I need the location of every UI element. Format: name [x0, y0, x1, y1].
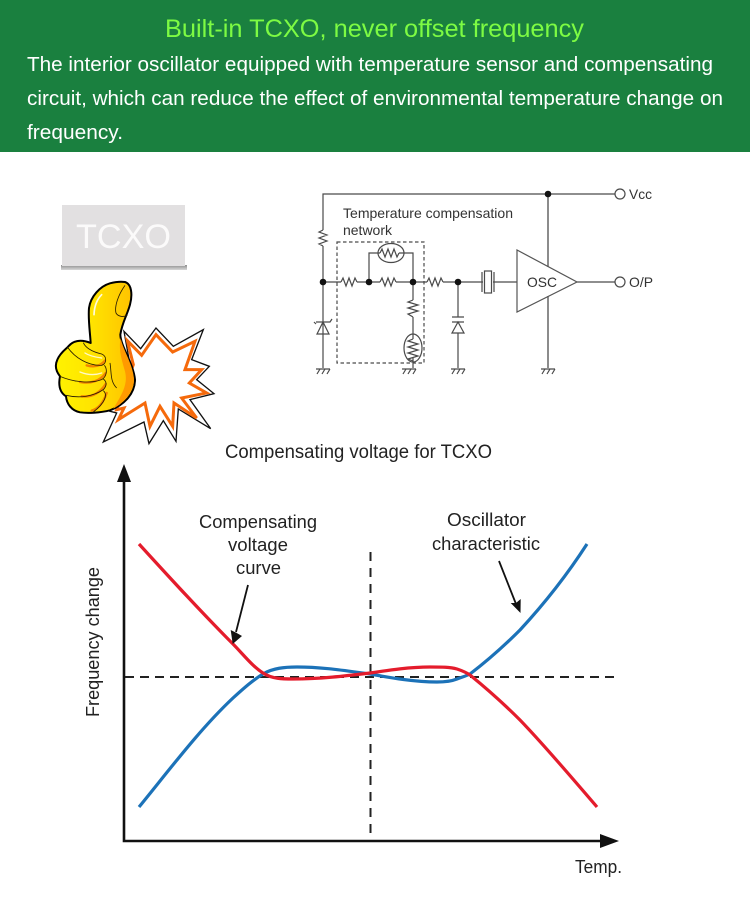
circuit labels	[343, 186, 653, 290]
axis and curve labels: Temp.	[575, 857, 622, 877]
nodes	[320, 191, 551, 285]
terminals	[615, 189, 625, 199]
description text: circuit, which can reduce the effect of environmental temperature change on	[27, 88, 723, 110]
line chart	[83, 464, 622, 877]
amplifier	[517, 250, 577, 312]
ground symbols	[316, 369, 555, 374]
finger and nail lines	[60, 285, 127, 412]
description text: The interior oscillator equipped with temperature sensor and compensating	[27, 54, 713, 76]
hand shading	[113, 338, 134, 409]
oscillator characteristic curve	[139, 544, 587, 807]
thermistors	[378, 244, 404, 262]
TCXO badge	[61, 205, 187, 270]
axis and curve labels: Oscillator	[447, 510, 526, 530]
TCXO badge: TCXO	[76, 218, 171, 256]
circuit labels: Vcc	[629, 186, 652, 202]
burst	[103, 328, 214, 444]
axis and curve labels	[83, 510, 622, 877]
axis and curve labels: characteristic	[432, 534, 540, 554]
crystal	[482, 272, 494, 292]
heading: Built-in TCXO, never offset frequency	[165, 15, 584, 43]
wires	[323, 194, 615, 368]
network box	[337, 242, 424, 363]
diodes	[314, 317, 464, 334]
circuit labels: OSC	[527, 274, 557, 290]
circuit diagram	[314, 186, 653, 374]
axis and curve labels: curve	[236, 558, 281, 578]
arrow: to compensating curve	[231, 585, 248, 644]
chart title: Compensating voltage for TCXO	[225, 442, 492, 463]
axis and curve labels: voltage	[228, 535, 288, 555]
description text: frequency.	[27, 122, 123, 144]
axis and curve labels: Frequency change	[83, 567, 103, 717]
axis and curve labels: Compensating	[199, 512, 317, 532]
axes	[124, 478, 606, 841]
arrow: to oscillator curve	[499, 561, 521, 613]
resistors	[319, 230, 443, 361]
circuit labels: Temperature compensation	[343, 205, 513, 221]
icon: thumbs up with burst	[56, 282, 214, 444]
compensating voltage curve	[139, 544, 597, 807]
thumb and hand	[56, 282, 135, 413]
dashed reference lines	[125, 676, 618, 678]
panel: green header	[0, 0, 750, 152]
description text	[27, 54, 723, 144]
circuit labels: network	[343, 222, 393, 238]
circuit labels: O/P	[629, 274, 653, 290]
